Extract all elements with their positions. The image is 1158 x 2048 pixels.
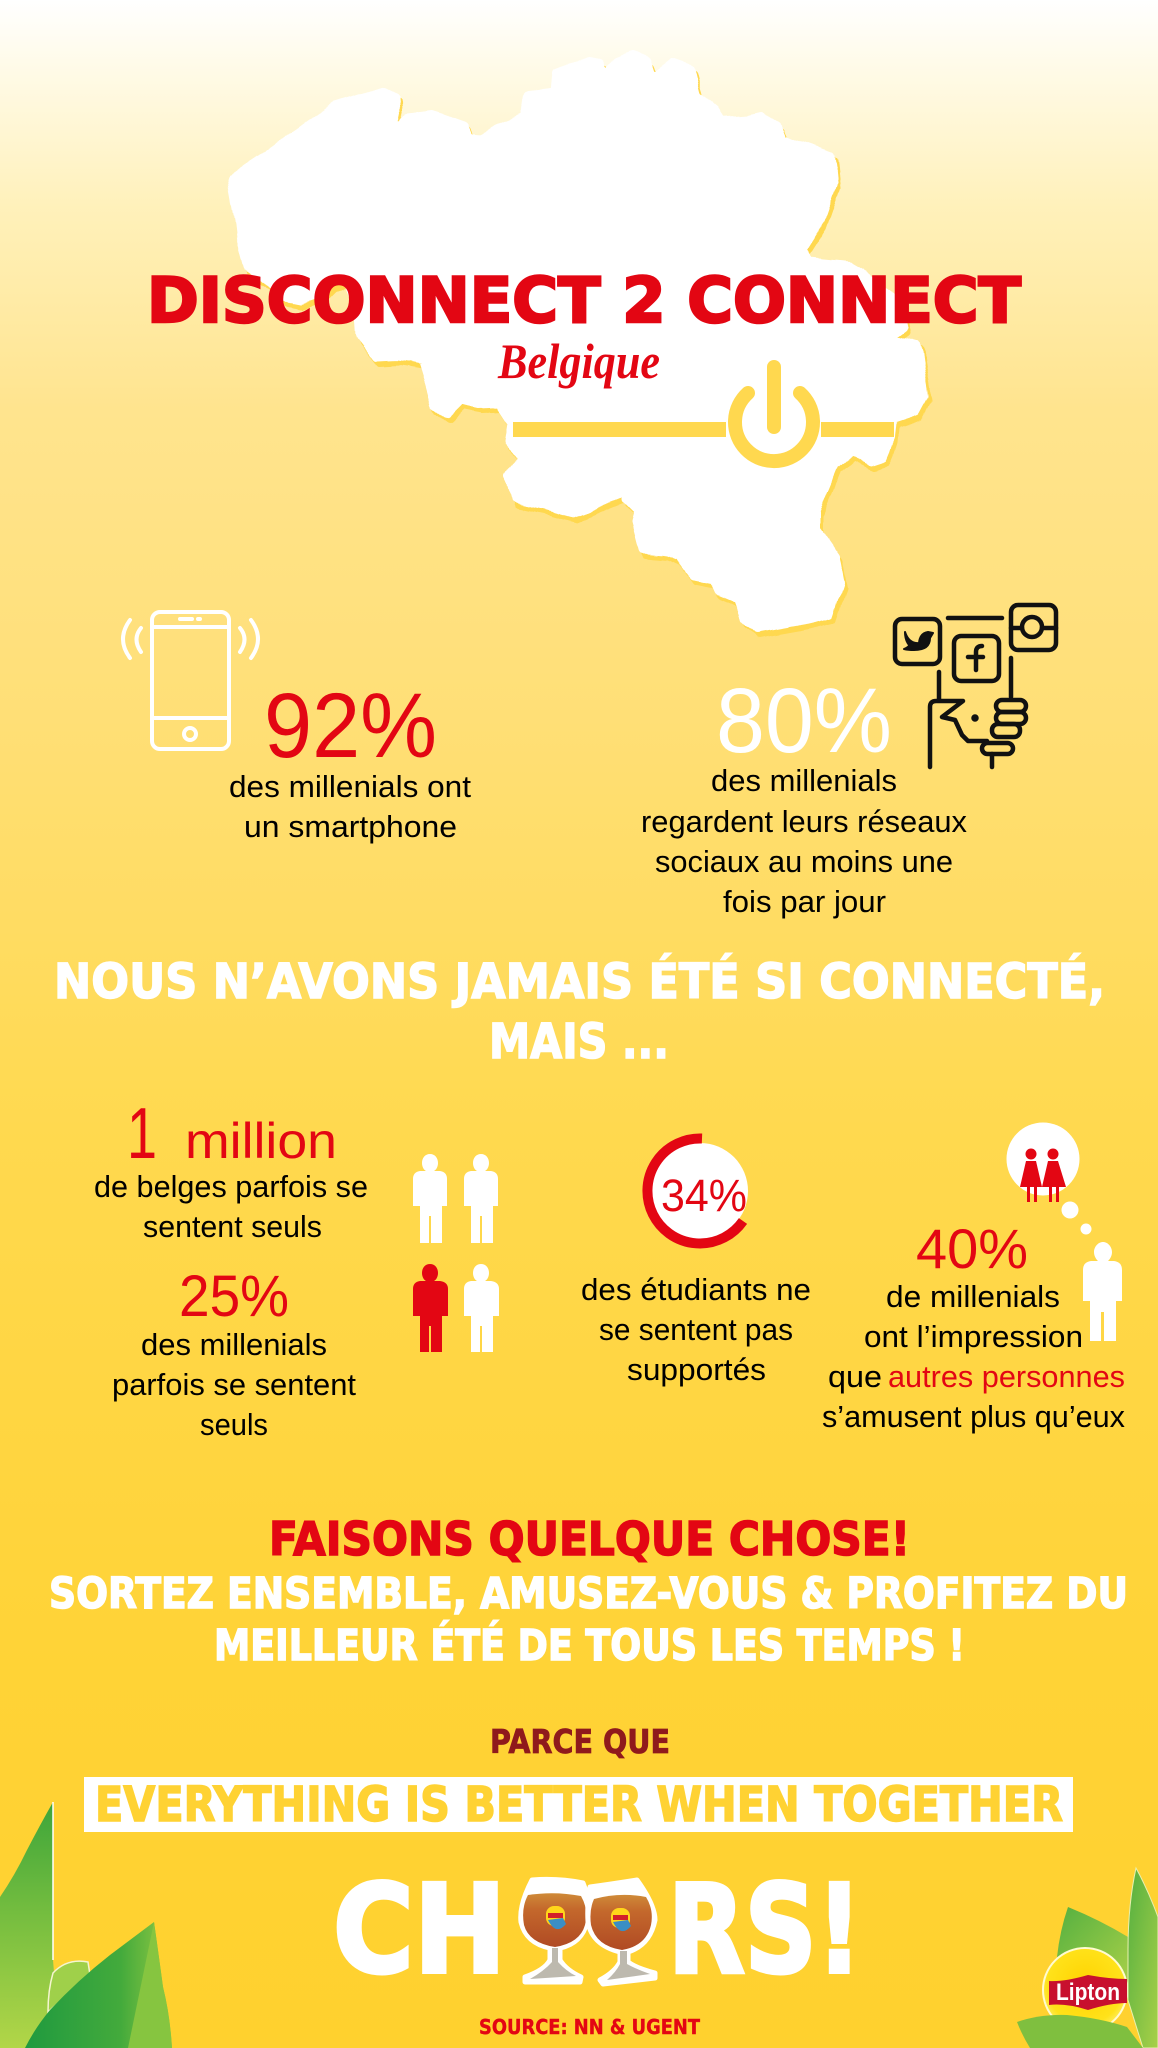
text: social networks stat: fois par jour xyxy=(723,884,886,919)
text: millenials alone xyxy=(112,1327,356,1442)
heading: connected: NOUS N’AVONS JAMAIS ÉTÉ SI CONNECTÉ, xyxy=(54,953,1105,1010)
stat: 1 million: million xyxy=(185,1113,337,1169)
text: belgians alone: de belges parfois se xyxy=(94,1169,368,1204)
text: students xyxy=(581,1272,811,1387)
heading: go out together: MEILLEUR ÉTÉ DE TOUS LES TEMPS ! xyxy=(214,1620,965,1671)
cheers word xyxy=(333,1859,862,2001)
stat: 1 million xyxy=(127,1094,337,1174)
stat: 80%: 80% xyxy=(716,670,892,772)
stat: 92%: 92% xyxy=(264,675,437,777)
text: students: supportés xyxy=(627,1352,766,1387)
leaves: bottom left xyxy=(0,1802,172,2048)
text: belgians alone: sentent seuls xyxy=(143,1209,322,1244)
text: others have fun: ont l’impression xyxy=(864,1319,1083,1354)
subtitle: Belgique: Belgique xyxy=(497,333,660,389)
cheers word: RS! xyxy=(668,1859,862,2001)
title: DISCONNECT 2 CONNECT xyxy=(147,264,1021,337)
text: social networks stat: sociaux au moins une xyxy=(655,844,953,879)
text: social networks stat: regardent leurs réseaux xyxy=(641,804,967,839)
cheers word: CH xyxy=(333,1859,506,2001)
text: social networks stat xyxy=(641,763,967,919)
icon: thought bubble with person xyxy=(1006,1122,1122,1341)
chart: 34% ring: 34% xyxy=(661,1170,747,1221)
text: social networks stat: des millenials xyxy=(711,763,897,798)
text: millenials alone: parfois se sentent xyxy=(112,1367,356,1402)
heading: connected xyxy=(54,953,1105,1070)
heading: do something: FAISONS QUELQUE CHOSE! xyxy=(269,1512,910,1566)
stat: 25%: 25% xyxy=(179,1264,289,1329)
text: others have fun: autres personnes xyxy=(888,1359,1125,1394)
text: students: des étudiants ne xyxy=(581,1272,811,1307)
text: others have fun: de millenials xyxy=(886,1279,1060,1314)
text: others have fun: s’amusent plus qu’eux xyxy=(822,1399,1125,1434)
icon: two white people xyxy=(413,1154,498,1243)
text: others have fun xyxy=(822,1279,1125,1434)
icon: two glasses of iced tea xyxy=(521,1879,655,1984)
text: belgians alone xyxy=(94,1169,368,1244)
left glass xyxy=(521,1879,589,1982)
heading: connected: MAIS ... xyxy=(489,1014,669,1070)
chart: 34% ring xyxy=(647,1138,748,1243)
icon: power button xyxy=(513,367,894,461)
icon: hand holding social networks xyxy=(895,605,1056,767)
right glass xyxy=(588,1880,655,1984)
text: source: SOURCE: NN & UGENT xyxy=(479,2015,700,2039)
logo: Lipton xyxy=(1043,1948,1127,2032)
stat: 40%: 40% xyxy=(916,1217,1028,1280)
icon: one red one white person xyxy=(413,1264,499,1352)
logo: Lipton: Lipton xyxy=(1056,1979,1120,2006)
text: smartphone stat: un smartphone xyxy=(244,809,457,844)
heading: go out together xyxy=(49,1569,1128,1671)
text: students: se sentent pas xyxy=(599,1312,793,1347)
text: millenials alone: seuls xyxy=(200,1407,268,1442)
icon: smartphone xyxy=(123,612,258,749)
stat: 1 million: 1 xyxy=(127,1094,157,1174)
text: smartphone stat xyxy=(229,769,471,844)
leaves and Lipton logo: bottom right xyxy=(1017,1868,1158,2048)
text: parce que: PARCE QUE xyxy=(490,1722,670,1761)
map of Belgium xyxy=(232,57,928,634)
text: millenials alone: des millenials xyxy=(141,1327,327,1362)
text: others have fun: que xyxy=(828,1359,882,1394)
text: smartphone stat: des millenials ont xyxy=(229,769,471,804)
